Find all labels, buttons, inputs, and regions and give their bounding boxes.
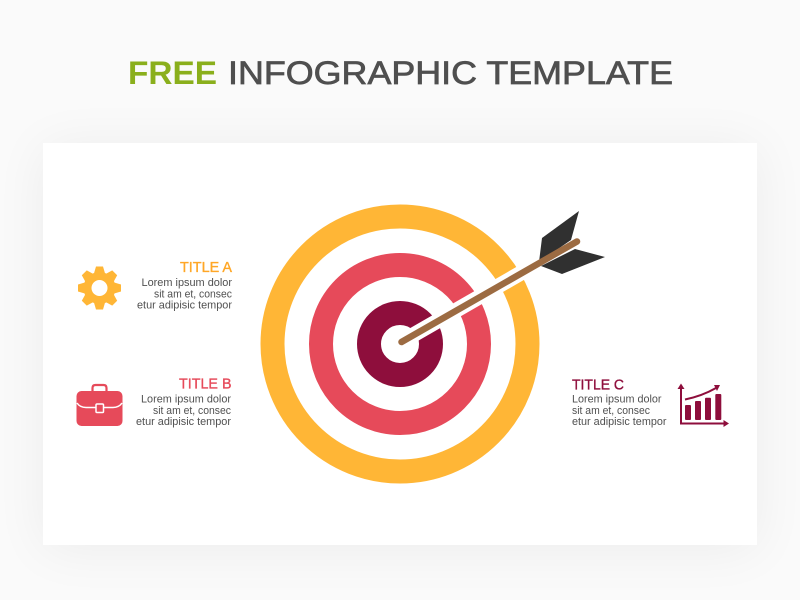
text block: title B: sit am et, consec	[153, 405, 231, 417]
middle ring	[321, 265, 479, 423]
text block: title C: etur adipisic tempor	[572, 416, 667, 428]
text block: title C	[572, 376, 667, 428]
arrow lower fletching	[541, 249, 605, 274]
text block: title B: Lorem ipsum dolor	[141, 394, 231, 406]
title: FREE	[128, 55, 217, 91]
text block: title A: etur adipisic tempor	[137, 300, 232, 312]
target chart	[272, 216, 540, 472]
arrow upper fletching	[539, 211, 579, 262]
text block: title A: TITLE A	[180, 259, 232, 276]
panel: white card	[43, 143, 757, 545]
text block: title C: Lorem ipsum dolor	[572, 394, 662, 406]
text block: title A: sit am et, consec	[154, 288, 232, 300]
text block: title A	[137, 259, 232, 312]
text block: title B: TITLE B	[179, 375, 232, 392]
text block: title C: sit am et, consec	[572, 405, 650, 417]
icon: bar chart	[678, 384, 729, 427]
text block: title B	[136, 375, 232, 428]
icon: gear	[78, 266, 121, 310]
text block: title C: TITLE C	[572, 376, 624, 393]
icon: arrow	[402, 211, 605, 342]
text block: title B: etur adipisic tempor	[136, 416, 231, 428]
icon: briefcase	[76, 385, 122, 426]
text block: title A: Lorem ipsum dolor	[142, 277, 232, 289]
title: INFOGRAPHIC TEMPLATE	[228, 55, 673, 91]
outer ring	[272, 216, 528, 472]
arrow shaft	[402, 242, 577, 342]
inner ring	[369, 313, 431, 375]
arrow gap	[401, 262, 540, 342]
